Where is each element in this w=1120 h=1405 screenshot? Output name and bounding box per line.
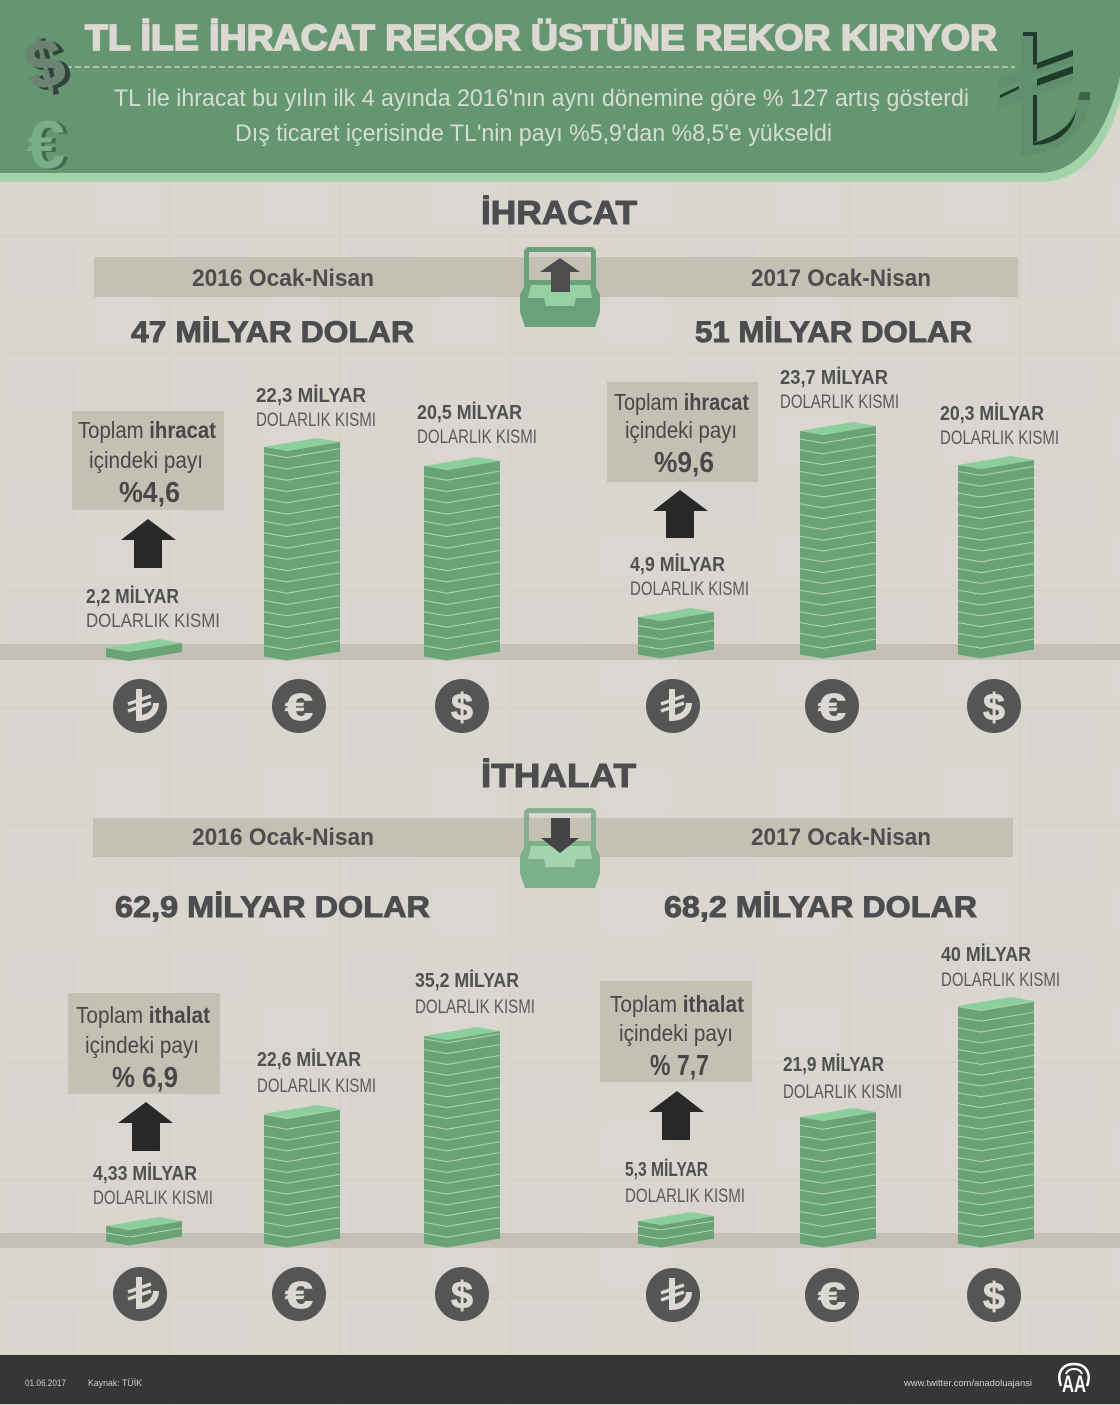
total: 51 billion: 51 MİLYAR DOLAR bbox=[695, 316, 972, 349]
label: 23,7: DOLARLIK KISMI bbox=[780, 392, 899, 413]
bar: TL 2017 export bbox=[638, 608, 714, 659]
label: 20,5 bbox=[417, 401, 537, 448]
callout: 2016 import share: Toplam ithalat bbox=[76, 1002, 210, 1028]
callout: 2017 import share: içindeki payı bbox=[619, 1020, 733, 1046]
icon: import box with down arrow bbox=[520, 810, 600, 888]
icon: dollar circle bbox=[435, 1267, 489, 1321]
arrow: up bbox=[653, 490, 708, 538]
label: 21,9: DOLARLIK KISMI bbox=[783, 1082, 902, 1103]
callout: 2016 import share bbox=[68, 993, 220, 1094]
label: 22,6: 22,6 MİLYAR bbox=[257, 1048, 361, 1071]
icon: dollar circle: $ bbox=[983, 687, 1005, 729]
twitter link: www.twitter.com/anadoluajansi bbox=[903, 1378, 1032, 1389]
subtitle line 1: TL ile ihracat bu yılın ilk 4 ayında 2016'nın aynı dönemine göre % 127 artış gösterdi bbox=[114, 85, 969, 112]
arrow: up bbox=[118, 1102, 173, 1151]
icon: 3D dollar: $ bbox=[17, 23, 72, 106]
label: 2,2: DOLARLIK KISMI bbox=[86, 611, 220, 632]
icon: dollar circle: $ bbox=[983, 1276, 1005, 1318]
callout: 2017 export share: Toplam ihracat bbox=[614, 389, 749, 415]
title: TL İLE İHRACAT REKOR ÜSTÜNE REKOR KIRIYOR bbox=[85, 17, 997, 58]
arrow: up bbox=[121, 519, 176, 568]
ground band: ithalat bbox=[0, 1233, 1120, 1248]
bar: euro 2017 import bbox=[800, 1108, 876, 1248]
total: 47 billion: 47 MİLYAR DOLAR bbox=[131, 316, 414, 349]
label: 5,3 bbox=[625, 1158, 745, 1207]
icon: dollar circle: $ bbox=[451, 687, 473, 729]
period band: ihracat: 2017 Ocak-Nisan bbox=[751, 265, 931, 292]
label: 21,9 bbox=[783, 1053, 902, 1103]
label: 2,2: 2,2 MİLYAR bbox=[86, 585, 179, 608]
label: 35,2: DOLARLIK KISMI bbox=[415, 997, 535, 1018]
icon: euro circle bbox=[805, 1268, 859, 1322]
label: 4,9 bbox=[630, 553, 749, 600]
icon: lira circle bbox=[646, 1268, 700, 1322]
icon: euro circle bbox=[805, 679, 859, 733]
icon: euro circle: € bbox=[285, 687, 313, 729]
label: 40 bbox=[941, 943, 1060, 991]
subtitle line 2: Dış ticaret içerisinde TL'nin payı %5,9'dan %8,5'e yükseldi bbox=[235, 120, 832, 147]
label: 20,3: DOLARLIK KISMI bbox=[940, 428, 1059, 449]
callout: 2017 import share: Toplam ithalat bbox=[610, 991, 744, 1017]
icon: 3D lira bbox=[998, 32, 1090, 156]
label: 22,3: DOLARLIK KISMI bbox=[256, 410, 376, 431]
icon: AA logo: AA bbox=[1062, 1371, 1086, 1398]
icon: euro circle bbox=[272, 679, 326, 733]
period band: ihracat bbox=[94, 257, 1018, 297]
label: 20,3 bbox=[940, 402, 1059, 449]
label: 40: 40 MİLYAR bbox=[941, 943, 1031, 966]
period band: ithalat: 2016 Ocak-Nisan bbox=[192, 824, 374, 851]
source: Kaynak: TÜİK bbox=[88, 1378, 143, 1389]
ground band: ihracat bbox=[0, 644, 1120, 660]
label: 22,3: 22,3 MİLYAR bbox=[256, 384, 367, 407]
bar: TL 2016 export bbox=[106, 639, 182, 661]
callout: 2016 export share: %4,6 bbox=[119, 477, 180, 509]
label: 22,3 bbox=[256, 384, 376, 431]
bar: TL 2016 import bbox=[106, 1217, 182, 1246]
footer bar bbox=[0, 1355, 1120, 1404]
icon: dollar circle bbox=[435, 679, 489, 733]
label: 40: DOLARLIK KISMI bbox=[941, 970, 1060, 991]
section heading: ithalat: İTHALAT bbox=[481, 757, 636, 794]
callout: 2016 export share bbox=[72, 411, 224, 510]
icon: dollar circle bbox=[967, 679, 1021, 733]
label: 4,9: DOLARLIK KISMI bbox=[630, 579, 749, 600]
bar: TL 2017 import bbox=[638, 1212, 714, 1248]
period band: ihracat: 2016 Ocak-Nisan bbox=[192, 265, 374, 292]
bar: euro 2016 export bbox=[264, 438, 340, 661]
label: 4,33: 4,33 MİLYAR bbox=[93, 1162, 197, 1185]
callout: 2016 import share: % 6,9 bbox=[112, 1062, 178, 1094]
icon: lira circle bbox=[113, 1267, 167, 1321]
callout: 2017 import share: % 7,7 bbox=[650, 1050, 709, 1082]
icon: euro circle: € bbox=[285, 1275, 313, 1317]
bar: euro 2017 export bbox=[800, 422, 876, 659]
icon: dollar circle: $ bbox=[451, 1275, 473, 1317]
icon: 3D dollar: $ bbox=[22, 25, 77, 108]
label: 23,7: 23,7 MİLYAR bbox=[780, 366, 888, 389]
total: 68,2 billion: 68,2 MİLYAR DOLAR bbox=[664, 891, 977, 924]
bar: dollar 2017 import bbox=[958, 997, 1034, 1248]
label: 5,3: 5,3 MİLYAR bbox=[625, 1158, 708, 1181]
label: 5,3: DOLARLIK KISMI bbox=[625, 1186, 745, 1207]
label: 23,7 bbox=[780, 366, 899, 413]
label: 4,33 bbox=[93, 1162, 213, 1209]
icon: lira circle bbox=[646, 679, 700, 733]
label: 22,6: DOLARLIK KISMI bbox=[257, 1076, 376, 1097]
callout: 2016 export share: Toplam ihracat bbox=[78, 417, 216, 443]
icon: dollar circle bbox=[967, 1268, 1021, 1322]
bar: dollar 2017 export bbox=[958, 456, 1034, 659]
label: 20,5: DOLARLIK KISMI bbox=[417, 427, 537, 448]
icon: euro circle: € bbox=[818, 687, 846, 729]
callout: 2017 export share: içindeki payı bbox=[625, 417, 737, 443]
icon: euro circle bbox=[272, 1267, 326, 1321]
callout: 2017 import share bbox=[600, 981, 752, 1082]
label: 20,5: 20,5 MİLYAR bbox=[417, 401, 522, 424]
icon: AA logo bbox=[1059, 1364, 1089, 1398]
label: 4,33: DOLARLIK KISMI bbox=[93, 1188, 213, 1209]
icon: euro circle: € bbox=[818, 1276, 846, 1318]
bar: euro 2016 import bbox=[264, 1105, 340, 1248]
label: 35,2: 35,2 MİLYAR bbox=[415, 969, 519, 992]
label: 4,9: 4,9 MİLYAR bbox=[630, 553, 725, 576]
icon: export box with up arrow bbox=[520, 250, 600, 327]
bar: dollar 2016 export bbox=[424, 457, 500, 661]
callout: 2016 import share: içindeki payı bbox=[85, 1032, 199, 1058]
callout: 2017 export share: %9,6 bbox=[654, 447, 714, 479]
total: 62,9 billion: 62,9 MİLYAR DOLAR bbox=[115, 891, 430, 924]
callout: 2016 export share: içindeki payı bbox=[89, 447, 203, 473]
icon: 3D euro: € bbox=[31, 108, 69, 184]
date: 01.06.2017 bbox=[25, 1378, 66, 1389]
label: 35,2 bbox=[415, 969, 535, 1018]
section heading: ihracat: İHRACAT bbox=[481, 194, 637, 231]
callout: 2017 export share bbox=[607, 382, 758, 482]
label: 20,3: 20,3 MİLYAR bbox=[940, 402, 1044, 425]
label: 21,9: 21,9 MİLYAR bbox=[783, 1053, 884, 1076]
bar: dollar 2016 import bbox=[424, 1027, 500, 1248]
icon: lira circle bbox=[113, 679, 167, 733]
period band: ithalat bbox=[93, 818, 1013, 857]
label: 22,6 bbox=[257, 1048, 376, 1097]
arrow: up bbox=[649, 1091, 704, 1140]
period band: ithalat: 2017 Ocak-Nisan bbox=[751, 824, 931, 851]
label: 2,2 bbox=[86, 585, 220, 632]
header banner bbox=[0, 0, 1120, 184]
icon: 3D euro: € bbox=[27, 107, 65, 183]
